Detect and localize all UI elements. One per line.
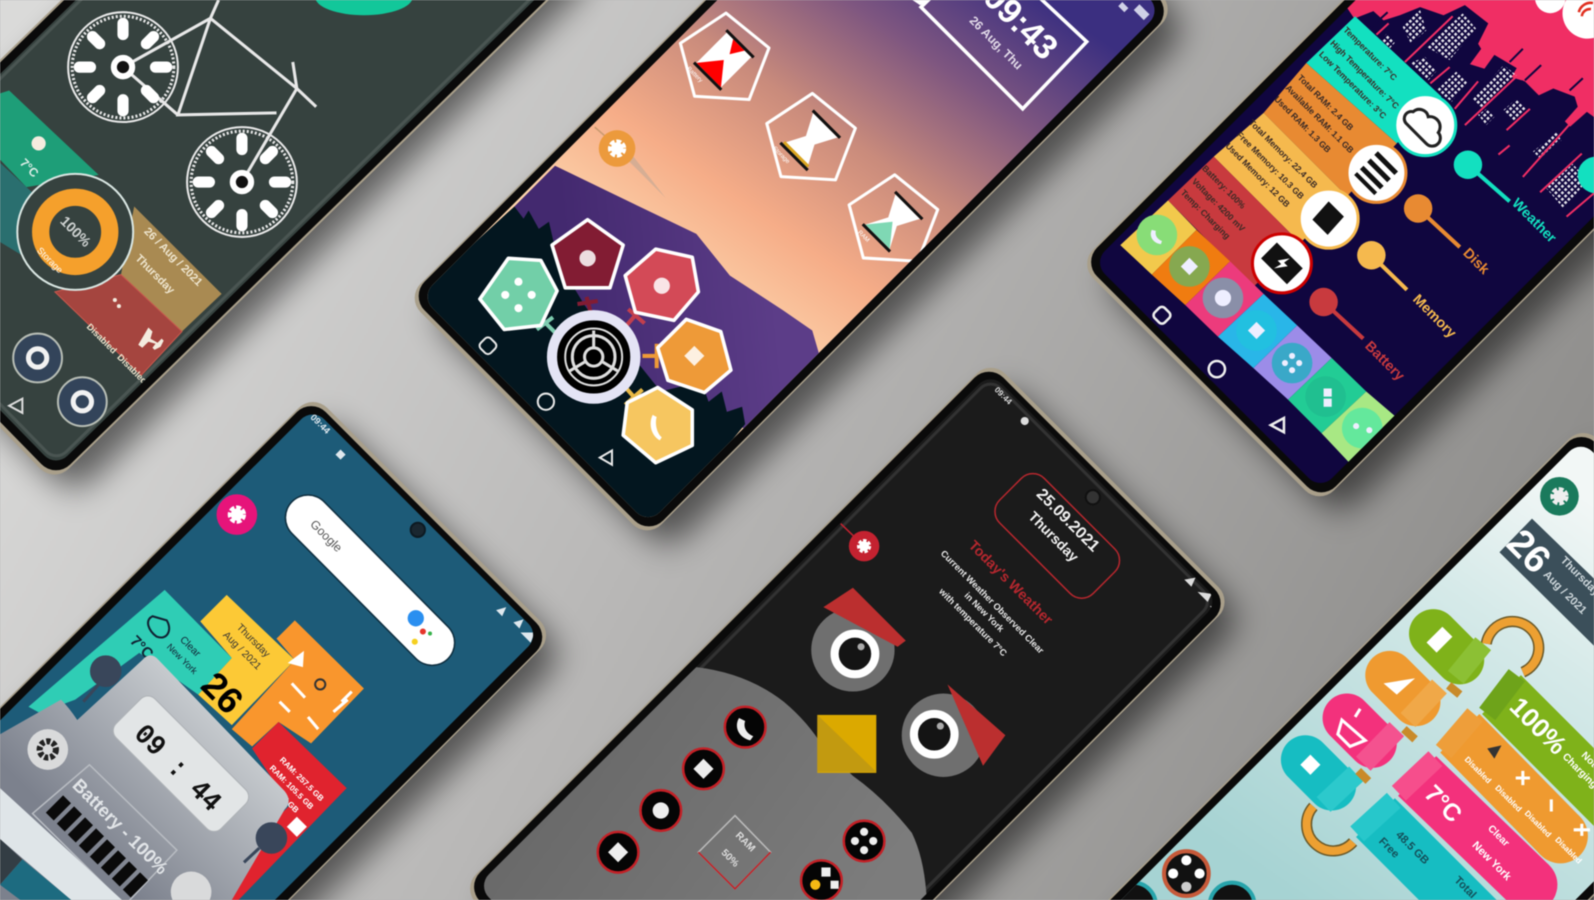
screen gradient <box>1067 407 1594 900</box>
connector stems <box>537 297 657 405</box>
search pill: Google <box>307 517 345 555</box>
teal widget <box>28 590 232 713</box>
date and status labels <box>85 226 204 386</box>
ram diamond: 50% <box>719 847 741 870</box>
stub pills <box>1305 634 1460 786</box>
round app icons <box>598 707 884 900</box>
search pill <box>307 517 432 645</box>
white strip and dark block <box>0 788 122 900</box>
purple hills <box>488 166 819 432</box>
front camera <box>1086 490 1100 504</box>
pill content: 7°C <box>1419 780 1467 828</box>
skyline <box>1352 5 1594 305</box>
info bands <box>1306 16 1442 143</box>
storage ring: 100% <box>56 214 94 251</box>
phone body <box>406 0 1176 539</box>
phone: black owl theme <box>407 359 1233 900</box>
clock display: 09 : 44 <box>127 718 228 819</box>
storage ring <box>17 174 133 290</box>
owl beak <box>817 715 876 773</box>
battery box <box>33 765 177 900</box>
teal widget: Clear <box>177 635 203 660</box>
phone body <box>462 359 1233 900</box>
band text <box>1179 25 1401 241</box>
grey clock panel <box>0 655 289 900</box>
green blob <box>315 0 413 15</box>
sky gradient <box>427 0 1155 518</box>
pin labels <box>1361 195 1560 384</box>
teal widget: 7°C <box>126 633 156 663</box>
pin labels: Disk <box>1460 245 1492 278</box>
battery box: Battery - 100% <box>68 774 172 878</box>
band text: Low Temperature: 3°C <box>1317 49 1388 121</box>
long pills <box>1375 695 1594 900</box>
flower button <box>27 729 68 770</box>
pill content: Disabled <box>1493 783 1524 814</box>
band text: Total RAM: 2.4 GB <box>1296 73 1356 132</box>
pill icons <box>1300 627 1590 836</box>
pill connectors <box>1358 685 1460 781</box>
lower app circles <box>1111 883 1156 900</box>
central settings gear <box>552 315 635 399</box>
building windows <box>1381 10 1588 208</box>
hourglass icon: battery <box>678 11 771 102</box>
band text: Available RAM: 1.1 GB <box>1284 83 1356 155</box>
date and status labels: Thursday <box>133 252 177 297</box>
hourglass icon: storage: Storage <box>771 145 792 166</box>
storage ring: Storage <box>35 245 65 275</box>
date tag <box>1498 519 1594 646</box>
right owl eye <box>902 684 1005 777</box>
pill cuffs <box>1324 644 1517 834</box>
date tag: 26 <box>1498 521 1559 582</box>
storage text: 48.5 GB <box>1393 829 1431 867</box>
band text: Used RAM: 1.3 GB <box>1272 94 1333 155</box>
date tag: Aug / 2021 <box>1541 569 1589 617</box>
icon glyphs on hexagons <box>501 250 704 440</box>
settings dot <box>595 127 666 198</box>
phone: teal widgets theme <box>0 394 555 900</box>
red memory widget: RAM: 5 GB <box>264 778 301 815</box>
weather text: Today's Weather <box>965 538 1056 628</box>
clock box: 26 Aug, Thu <box>967 13 1025 72</box>
clock display <box>109 692 253 836</box>
settings dot <box>1540 477 1579 516</box>
date and status labels: Disabled <box>115 352 149 386</box>
status bar <box>309 412 535 643</box>
phone body <box>1079 0 1594 505</box>
pink sky <box>1342 0 1594 183</box>
storage text: Free <box>1376 835 1401 861</box>
band text: Temperature: 7°C <box>1341 25 1399 82</box>
hourglass icon: ram: RAM <box>856 229 871 244</box>
pin labels: Battery <box>1361 338 1407 384</box>
panel pins <box>83 657 286 862</box>
red memory widget: RAM: 105.5 GB <box>268 764 315 811</box>
orange status widget <box>232 620 364 746</box>
yellow date widget <box>193 595 295 725</box>
band text: Used Memory: 12 GB <box>1224 141 1292 209</box>
band text: High Temperature: 7°C <box>1328 38 1401 111</box>
widget bands <box>0 91 99 187</box>
pin labels: Memory <box>1409 292 1459 341</box>
pill content: New York <box>1470 839 1514 884</box>
yellow date widget: Aug / 2021 <box>220 630 263 673</box>
date and status labels: 26 / Aug / 2021 <box>141 226 204 289</box>
phone: sunset hexagon theme <box>406 0 1200 539</box>
orange loops <box>1307 621 1539 851</box>
date pill <box>988 467 1126 605</box>
nav buttons <box>478 336 612 465</box>
pink skyline accents <box>1376 16 1594 217</box>
app glyphs <box>608 718 877 890</box>
band text: Voltage: 4200 mV <box>1190 176 1247 234</box>
pill content: Disabled <box>1463 755 1493 785</box>
hexagon app icons <box>480 220 731 463</box>
clock box <box>905 0 1087 109</box>
yellow date widget: 26 <box>193 664 251 722</box>
ram diamond <box>698 816 771 889</box>
date pill: 25.09.2021 <box>1033 485 1103 555</box>
phone: city skyline theme <box>1079 0 1594 505</box>
pin labels: Weather <box>1508 195 1560 247</box>
lower button <box>171 872 211 900</box>
phone body <box>0 0 590 483</box>
left owl eye <box>811 588 906 692</box>
date and status labels: Disabled <box>85 322 119 356</box>
white indicator circles <box>1252 95 1456 293</box>
nav triangle <box>9 399 22 413</box>
phone body <box>1054 425 1594 900</box>
pill content: Disabled <box>1553 835 1583 866</box>
band text: Total Memory: 22.4 GB <box>1247 117 1320 190</box>
front camera <box>411 523 425 537</box>
round app icons <box>13 334 107 426</box>
weather text: in New York <box>962 590 1007 634</box>
band text: Temp: Charging <box>1179 188 1232 241</box>
hourglass icon: storage <box>764 91 858 182</box>
color tile strip <box>1120 200 1402 467</box>
phone body <box>0 394 555 900</box>
bicycle illustration <box>68 0 316 237</box>
teal widget: New York <box>165 642 200 676</box>
hourglass icon: ram <box>847 172 940 263</box>
weather text: with temperature 7°C <box>936 586 1009 658</box>
weather text: Current Weather Observed Clear <box>939 548 1046 656</box>
phone: bicycle theme <box>0 0 590 483</box>
pill content <box>1419 691 1594 884</box>
band text: Free Memory: 10.3 GB <box>1235 130 1306 201</box>
red memory widget: RAM: 257.5 GB <box>278 755 326 803</box>
multicolor app circle <box>1164 851 1209 896</box>
phone: bicycle theme: 7°C <box>17 156 42 180</box>
status bar <box>993 385 1222 614</box>
date pill: Thursday <box>1025 509 1081 566</box>
owl body <box>407 667 927 900</box>
dark foreground trees <box>426 206 746 518</box>
hourglass icon: battery: Battery <box>685 65 705 85</box>
pill content: Clear <box>1485 823 1511 849</box>
pill content: Disabled <box>1523 809 1553 839</box>
yellow date widget: Thursday <box>234 622 272 660</box>
antennas <box>1367 12 1583 91</box>
settings dot <box>841 524 879 561</box>
phone: pastel pills theme <box>1054 407 1594 900</box>
storage text <box>1376 829 1478 900</box>
settings dot <box>217 494 257 535</box>
nav buttons <box>1152 305 1284 432</box>
indicator glyphs <box>1261 101 1450 284</box>
status icons <box>1118 2 1150 20</box>
pill content: 100% <box>1504 691 1573 760</box>
band text: Battery: 100% <box>1200 163 1248 211</box>
ram diamond: RAM <box>733 830 757 854</box>
pins <box>1309 151 1510 339</box>
status bar: 09:44 <box>993 385 1014 407</box>
top right icons <box>1535 0 1566 13</box>
status bar: 09:44 <box>309 412 333 436</box>
red memory widget <box>229 722 347 900</box>
airplane and tiny status icons <box>32 136 164 350</box>
